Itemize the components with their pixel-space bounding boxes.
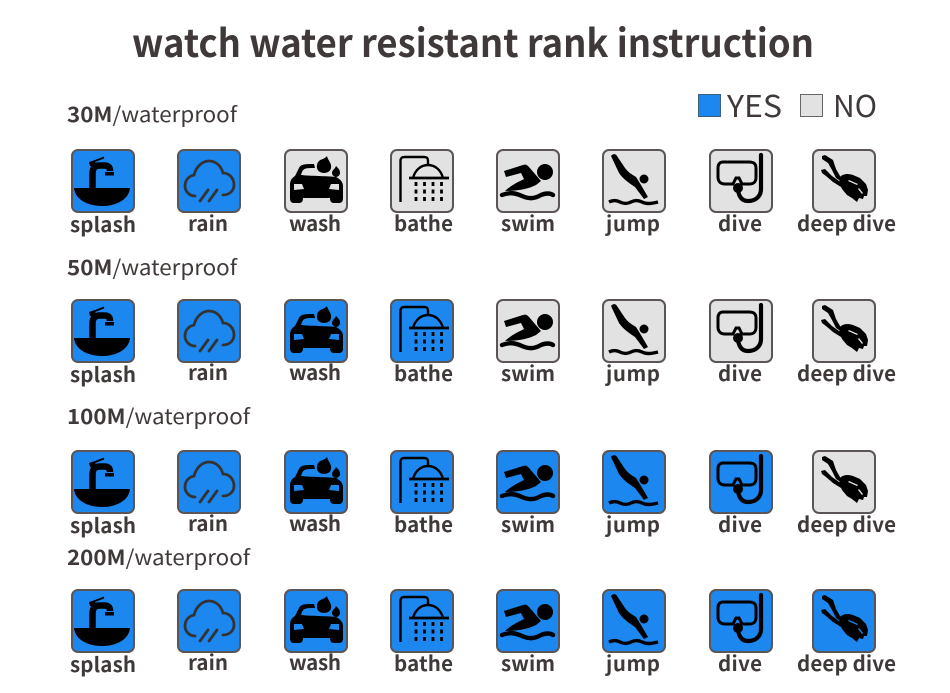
label: jump: jump <box>604 207 660 237</box>
panel: 200M waterproof <box>67 542 896 678</box>
label: bathe: bathe <box>394 508 453 538</box>
label: rain: rain <box>188 507 228 537</box>
label: swim: swim <box>501 647 555 677</box>
icon: dive yes <box>710 590 772 652</box>
heading: 200M: 200M/waterproof <box>67 542 251 572</box>
label: deep dive: deep dive <box>797 207 896 237</box>
icon: deep dive no <box>813 451 875 513</box>
icon: bathe yes <box>391 300 453 362</box>
legend: yes swatch <box>698 94 720 116</box>
label: dive: dive <box>718 207 762 237</box>
legend: no swatch <box>800 94 822 116</box>
heading: 30M: 30M/waterproof <box>67 99 238 129</box>
panel: 30M waterproof <box>67 99 896 238</box>
icon: dive no <box>710 150 772 212</box>
icon: swim yes <box>497 451 559 513</box>
label: deep dive: deep dive <box>797 647 896 677</box>
heading: 100M: 100M/waterproof <box>67 401 251 431</box>
label: wash: wash <box>289 356 341 386</box>
label: jump: jump <box>604 357 660 387</box>
label: wash: wash <box>289 507 341 537</box>
label: splash: splash <box>70 208 136 238</box>
panel: 50M waterproof <box>67 252 896 388</box>
label: wash: wash <box>289 646 341 676</box>
icon: rain yes <box>178 150 240 212</box>
icon: dive no <box>710 300 772 362</box>
label: bathe: bathe <box>394 357 453 387</box>
icon: deep dive yes <box>813 590 875 652</box>
legend <box>698 82 877 126</box>
icon: rain yes <box>178 451 240 513</box>
legend: yes label: YES <box>726 82 782 126</box>
icon: wash yes <box>285 590 347 652</box>
icon: bathe no <box>391 150 453 212</box>
icon: splash yes <box>72 150 134 212</box>
icon: dive yes <box>710 451 772 513</box>
label: rain: rain <box>188 207 228 237</box>
icon: wash yes <box>285 451 347 513</box>
label: rain: rain <box>188 646 228 676</box>
label: deep dive: deep dive <box>797 357 896 387</box>
icon: deep dive no <box>813 150 875 212</box>
label: bathe: bathe <box>394 647 453 677</box>
icon: bathe yes <box>391 590 453 652</box>
icon: wash no <box>285 150 347 212</box>
icon: splash yes <box>72 451 134 513</box>
label: swim: swim <box>501 357 555 387</box>
label: bathe: bathe <box>394 207 453 237</box>
label: dive: dive <box>718 508 762 538</box>
icon: rain yes <box>178 300 240 362</box>
icon: deep dive no <box>813 300 875 362</box>
label: swim: swim <box>501 508 555 538</box>
icon: wash yes <box>285 300 347 362</box>
icon: jump no <box>603 300 665 362</box>
icon: swim no <box>497 300 559 362</box>
label: swim: swim <box>501 207 555 237</box>
label: jump: jump <box>604 508 660 538</box>
label: jump: jump <box>604 647 660 677</box>
label: dive: dive <box>718 357 762 387</box>
label: wash: wash <box>289 207 341 237</box>
icon: jump no <box>603 150 665 212</box>
icon: jump yes <box>603 451 665 513</box>
icon: bathe yes <box>391 451 453 513</box>
icon: rain yes <box>178 590 240 652</box>
label: dive: dive <box>718 647 762 677</box>
icon: splash yes <box>72 300 134 362</box>
icon: jump yes <box>603 590 665 652</box>
heading: 50M: 50M/waterproof <box>67 252 238 282</box>
icon: swim no <box>497 150 559 212</box>
icon: splash yes <box>72 590 134 652</box>
label: rain: rain <box>188 356 228 386</box>
icon: swim yes <box>497 590 559 652</box>
title: watch water resistant rank instruction <box>132 13 814 68</box>
label: splash: splash <box>70 648 136 678</box>
label: splash: splash <box>70 358 136 388</box>
label: splash: splash <box>70 509 136 539</box>
panel: 100M waterproof <box>67 401 896 539</box>
legend: no label: NO <box>833 82 877 126</box>
label: deep dive: deep dive <box>797 508 896 538</box>
